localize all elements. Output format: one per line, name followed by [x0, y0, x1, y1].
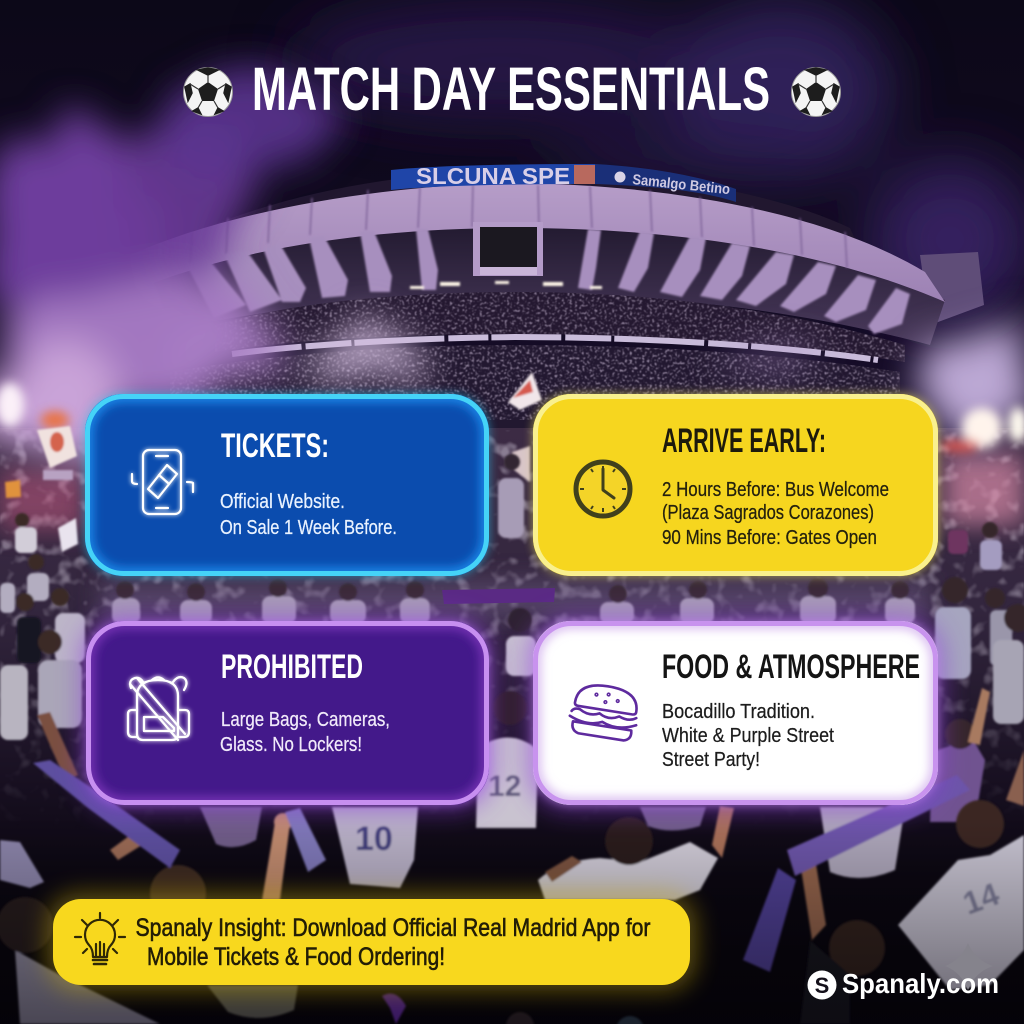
upper crowd tier: [236, 292, 905, 362]
icon: S badge: [808, 970, 836, 1000]
dim shirts under panels: [200, 807, 706, 847]
jersey 10 fan: 10: [355, 820, 393, 858]
jersey 14 fan right: 14: [958, 876, 1004, 922]
stadium concourse: [100, 224, 945, 345]
text: food details: Bocadillo Tradition.: [662, 700, 815, 723]
jersey 14 fan right: [898, 800, 1024, 990]
text: arrive details: (Plaza Sagrados Corazones): [662, 501, 874, 524]
top sponsor banner right: [595, 164, 736, 202]
dim shirt under callout: [207, 985, 298, 1018]
centre gap fans: [506, 636, 536, 676]
text: arrive details: 2 Hours Before: Bus Welcome: [662, 478, 889, 501]
crowd speckle: [0, 430, 1024, 830]
text: prohibited details: Glass. No Lockers!: [220, 733, 362, 756]
stadium facade band: [88, 183, 945, 312]
crowd figures: [0, 454, 1024, 888]
text: food details: [662, 700, 834, 771]
text: prohibited details: [220, 708, 390, 756]
stadium lights: [410, 281, 602, 289]
logo: spanaly.com: [808, 943, 999, 1000]
fan scarves: [33, 760, 970, 972]
purple scarf in crowd: [442, 588, 555, 604]
distant fans bottom: [506, 1012, 644, 1024]
jersey 12 fan: [476, 691, 538, 828]
callout: spanaly insight: [47, 893, 696, 991]
text: spanaly.com: Spanaly.com: [842, 968, 999, 999]
lower crowd tier: [170, 345, 900, 430]
purple sky haze: [290, 0, 1024, 320]
text: food details: Street Party!: [662, 748, 760, 771]
text: arrive details: [662, 478, 889, 549]
flags: [5, 372, 542, 552]
right crowd: [948, 530, 968, 554]
panel: prohibited: [78, 613, 497, 813]
text: tickets details: Official Website.: [220, 490, 345, 513]
icon: S badge: S: [815, 973, 829, 998]
icon: football right: [792, 68, 840, 116]
text: food details: White & Purple Street: [662, 724, 834, 747]
icon: light bulb: [75, 913, 125, 964]
facade joints: [190, 185, 847, 268]
text: prohibited details: Large Bags, Cameras,: [221, 708, 390, 731]
seated fan with glasses: [800, 858, 885, 1024]
icon: phone ticket: [132, 450, 193, 514]
heading: prohibited: PROHIBITED: [221, 648, 363, 686]
raised arm fan centre: [538, 806, 734, 900]
icon: football left: [184, 68, 232, 116]
stadium led ring boards: [232, 337, 878, 360]
text: insight line one and two: [136, 914, 650, 971]
head and arm behind callout: [110, 813, 292, 921]
panel: arrive early: [533, 394, 938, 576]
icon: crossed backpack: [128, 677, 189, 740]
bottom left fan: [0, 897, 160, 1024]
top sponsor banner right: Samalgo Betino: [632, 172, 731, 198]
icon: sparkle watermark: [945, 943, 993, 990]
title: [184, 55, 840, 123]
text: tickets details: [220, 490, 397, 539]
central big screen: [473, 222, 543, 276]
flares: [0, 383, 1024, 453]
stadium side tower: [920, 252, 984, 325]
jersey 10 fan: [332, 807, 418, 888]
top sponsor banner left: [391, 163, 595, 190]
heading: arrive early: ARRIVE EARLY:: [662, 422, 826, 460]
left crowd: [0, 527, 85, 740]
heading: tickets: TICKETS:: [221, 427, 329, 465]
white shirt fan right: [820, 807, 905, 878]
shirts strip: [112, 596, 915, 624]
icon: burger: [567, 681, 641, 742]
crowd base: [0, 428, 1024, 1024]
panel: food and atmosphere: [525, 613, 946, 813]
icon: clock: [576, 462, 630, 516]
purple scarf tip: [382, 994, 406, 1024]
text: arrive details: 90 Mins Before: Gates Open: [662, 526, 877, 549]
foreground fans: [0, 691, 1024, 1024]
text: insight line one and two: Mobile Tickets & Food Ordering!: [147, 943, 445, 971]
jersey 12 fan: 12: [488, 770, 521, 803]
panel: tickets: [85, 394, 489, 576]
top sponsor banner left: SLCUNA SPE: [416, 163, 570, 189]
text: tickets details: On Sale 1 Week Before.: [220, 516, 397, 539]
stadium piers: [130, 229, 910, 334]
pink lit crowd patches: [0, 455, 1024, 620]
stadium upper structure: [88, 163, 984, 345]
title text: MATCH DAY ESSENTIALS: [252, 55, 770, 123]
text: insight line one and two: Spanaly Insight: Download Official Real Madrid App for: [136, 914, 650, 942]
stadium roof railing: [195, 170, 860, 250]
purple smoke clouds: [0, 65, 1024, 460]
